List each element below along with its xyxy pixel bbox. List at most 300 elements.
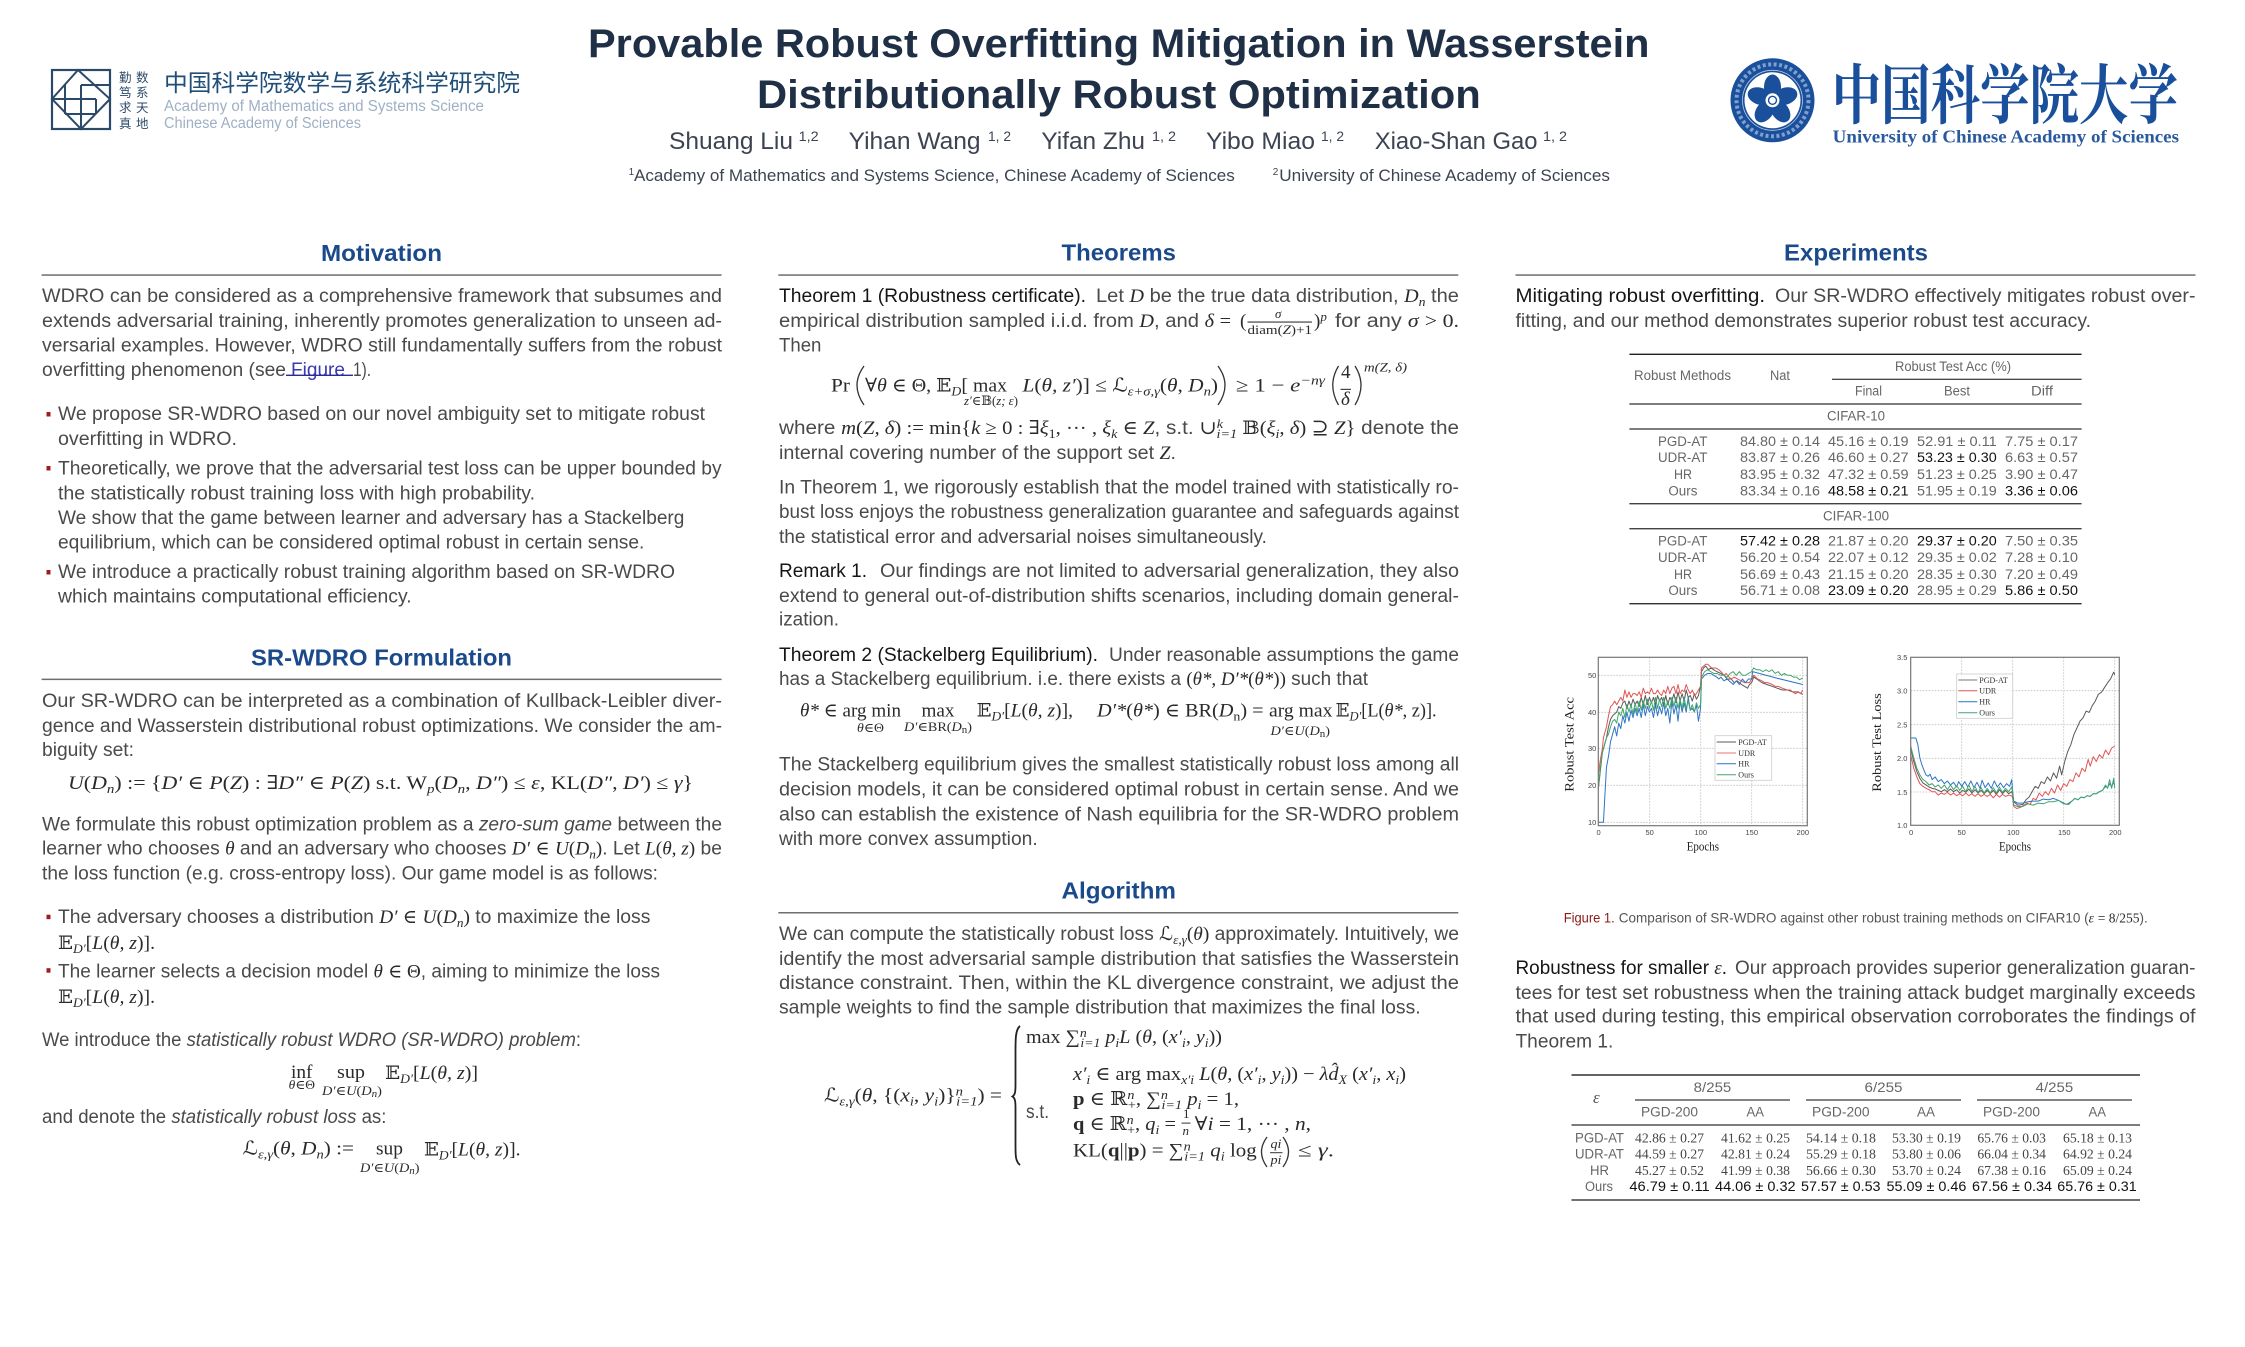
motto characters: 勤 bbox=[119, 71, 132, 85]
equation: Stackelberg equilibrium: ) bbox=[1325, 723, 1330, 738]
motivation paragraph: 1). bbox=[353, 360, 371, 381]
equation: ambiguity set: ( bbox=[435, 773, 442, 794]
equation: algorithm objective: ∈ arg max bbox=[1090, 1064, 1182, 1085]
equation: algorithm objective: i=1 bbox=[1161, 1097, 1182, 1112]
equation: algorithm objective: n bbox=[1127, 1087, 1134, 1102]
CIFAR-10 rows: 53.23 ± 0.30 bbox=[1917, 450, 1997, 465]
contribution bullets bbox=[46, 404, 722, 607]
axis tick labels: 3.5 bbox=[1897, 653, 1907, 662]
equation: algorithm objective: i bbox=[1205, 1035, 1209, 1050]
remark 1: Our findings are not limited to adversarial generalization, they also bbox=[880, 561, 1459, 582]
motto characters: 天 bbox=[136, 101, 149, 115]
row: UDR-AT: UDR-AT bbox=[1575, 1146, 1624, 1161]
algorithm paragraph: We can compute the statistically robust loss ℒ bbox=[779, 924, 1173, 945]
equation: algorithm objective: ) = bbox=[977, 1086, 1002, 1107]
row: Ours: 57.57 ± 0.53 bbox=[1801, 1179, 1880, 1194]
chart: robust test accuracy bbox=[1562, 657, 1809, 854]
game model bullets: D′ bbox=[72, 941, 86, 956]
CIFAR-100 rows: PGD-AT bbox=[1658, 534, 1707, 549]
authors: 1, 2 bbox=[1152, 128, 1176, 144]
equation: algorithm objective: L(θ, (x′ bbox=[1199, 1064, 1257, 1085]
equation: algorithm objective: i bbox=[1115, 1035, 1120, 1050]
row: HR: 67.38 ± 0.16 bbox=[1977, 1163, 2046, 1178]
covering number definition: ∈ bbox=[1117, 418, 1143, 439]
institute name: 中国科学院数学与系统科学研究院 bbox=[164, 70, 520, 96]
equation: robustness certificate: θ, D bbox=[1167, 376, 1202, 397]
equation: algorithm objective: , bbox=[1376, 1064, 1386, 1085]
equation: statistically robust loss: n bbox=[409, 1166, 415, 1177]
authors bbox=[669, 128, 1567, 155]
table header: Best bbox=[1944, 384, 1970, 399]
algorithm paragraph: identify the most adversarial sample distribution that satisfies the Wasserstein bbox=[779, 949, 1459, 970]
CIFAR-10 rows: 84.80 ± 0.14 bbox=[1740, 434, 1821, 449]
equation: inf sup: sup bbox=[337, 1062, 365, 1083]
motivation paragraph: versarial examples. However, WDRO still fundamentally suffers from the robust bbox=[42, 335, 723, 356]
chart: robust test loss bbox=[1870, 653, 2122, 854]
axis tick labels: 50 bbox=[1588, 671, 1596, 680]
CIFAR-100 rows: 29.35 ± 0.02 bbox=[1917, 550, 1997, 565]
game paragraph: the loss function (e.g. cross-entropy loss). Our game model is as follows: bbox=[42, 863, 658, 884]
equation: statistically robust loss: θ, D bbox=[280, 1138, 315, 1159]
equation: robustness certificate bbox=[831, 360, 1407, 410]
row: UDR-AT: 55.29 ± 0.18 bbox=[1806, 1146, 1876, 1161]
equation: robustness certificate: ε+σ,γ bbox=[1128, 384, 1161, 399]
row: HR: 56.66 ± 0.30 bbox=[1806, 1163, 1876, 1178]
row: Ours: Ours bbox=[1585, 1179, 1613, 1194]
equation: Stackelberg equilibrium: D′ bbox=[990, 709, 1004, 724]
equation: algorithm objective: , bbox=[1186, 1027, 1196, 1048]
formulation intro: gence and Wasserstein distributional robust optimizations. We consider the am- bbox=[42, 716, 722, 737]
row: UDR-AT: 44.59 ± 0.27 bbox=[1635, 1146, 1704, 1161]
equation: algorithm objective: X bbox=[1337, 1072, 1348, 1087]
equation: algorithm objective: i=1 bbox=[956, 1094, 977, 1109]
row: HR: 65.09 ± 0.24 bbox=[2063, 1163, 2132, 1178]
row: PGD-AT: 65.18 ± 0.13 bbox=[2063, 1130, 2132, 1145]
table header: Robust Test Acc (%) bbox=[1895, 359, 2011, 374]
equation: ambiguity set: , bbox=[465, 773, 476, 794]
equation: robustness certificate: Pr bbox=[831, 376, 851, 397]
axis tick labels: 150 bbox=[2058, 828, 2071, 837]
panel: experiments bbox=[1516, 240, 2196, 1201]
covering number definition: Z, s.t. ∪ bbox=[1143, 418, 1215, 439]
equation: algorithm objective: i bbox=[1086, 1072, 1091, 1087]
equation: algorithm objective: n bbox=[1080, 1025, 1087, 1040]
row: UDR-AT bbox=[1575, 1146, 2132, 1161]
CIFAR-100 rows: 7.50 ± 0.35 bbox=[2005, 534, 2078, 549]
table header: Robust Methods bbox=[1634, 368, 1731, 383]
equation: robustness certificate: [ bbox=[961, 376, 968, 397]
axis tick labels: 3.0 bbox=[1897, 686, 1907, 696]
heading: Theorems: Theorems bbox=[1062, 240, 1176, 266]
motto characters bbox=[119, 70, 149, 131]
equation: Stackelberg equilibrium: θ*, z)]. bbox=[1385, 701, 1438, 722]
game paragraph: We formulate this robust optimization problem as a zero-sum game between the bbox=[42, 814, 722, 835]
game paragraph: learner who chooses θ and an adversary who chooses D′ ∈ U(D bbox=[42, 838, 589, 859]
equation: algorithm objective: ( bbox=[855, 1086, 862, 1107]
axis tick labels: 30 bbox=[1588, 744, 1596, 753]
motto characters: 系 bbox=[136, 86, 149, 100]
theorem 1 discussion: the statistical error and adversarial noises simultaneously. bbox=[779, 527, 1267, 548]
mitigating robust overfitting paragraph bbox=[1516, 286, 2196, 332]
equation: algorithm objective: , bbox=[914, 1086, 925, 1107]
table header: 6/255 bbox=[1864, 1080, 1902, 1095]
theorem 1 statement: ) bbox=[1314, 311, 1320, 332]
row: PGD-AT: 53.30 ± 0.19 bbox=[1892, 1130, 1961, 1145]
row: Ours: 65.76 ± 0.31 bbox=[2057, 1179, 2137, 1194]
equation: algorithm objective: p bbox=[1185, 1089, 1198, 1110]
table header bbox=[1634, 359, 2053, 399]
game model bullets: L(θ, z)]. bbox=[92, 933, 154, 954]
title bbox=[588, 22, 1650, 117]
covering number definition: i bbox=[1276, 426, 1280, 441]
row: Ours: 67.56 ± 0.34 bbox=[1972, 1179, 2053, 1194]
robustness paragraph: Theorem 1. bbox=[1516, 1032, 1613, 1053]
CIFAR-10 rows: 48.58 ± 0.21 bbox=[1828, 484, 1908, 499]
CIFAR-10 rows: 45.16 ± 0.19 bbox=[1828, 434, 1908, 449]
game model bullets: n bbox=[457, 915, 463, 930]
equation: algorithm objective: x′ bbox=[1358, 1064, 1373, 1085]
motivation paragraph: overfitting phenomenon (see bbox=[42, 360, 286, 381]
robustness paragraph bbox=[1516, 958, 2196, 1053]
equation: algorithm objective: i bbox=[1198, 1097, 1202, 1112]
equation: algorithm objective: ) bbox=[1399, 1064, 1406, 1085]
axis titles bbox=[1562, 696, 1719, 854]
algorithm paragraph: θ) approximately. Intuitively, we bbox=[1193, 924, 1455, 945]
equation: algorithm objective: , ∑ bbox=[1136, 1089, 1161, 1110]
equation: Stackelberg equilibrium: D′*(θ*) ∈ BR(D bbox=[1097, 701, 1232, 722]
legend: Ours bbox=[1979, 708, 1995, 718]
table: robust test accuracy bbox=[1629, 354, 2082, 604]
row: PGD-AT: 65.76 ± 0.03 bbox=[1977, 1130, 2046, 1145]
equation: inf sup bbox=[289, 1062, 478, 1100]
equation: algorithm objective: + bbox=[1127, 1122, 1135, 1137]
CIFAR-100 rows: 56.69 ± 0.43 bbox=[1740, 567, 1820, 582]
equation: algorithm objective: i=1 bbox=[1080, 1035, 1100, 1050]
authors: 1, 2 bbox=[988, 128, 1011, 144]
axis tick labels: 200 bbox=[1796, 828, 1809, 837]
game paragraph bbox=[42, 814, 722, 884]
table header: 8/255 bbox=[1694, 1080, 1731, 1095]
equation: algorithm objective: x′ bbox=[1072, 1064, 1087, 1085]
legend bbox=[1715, 736, 1772, 780]
CIFAR-10 rows: PGD-AT bbox=[1658, 434, 1707, 449]
motto characters: 求 bbox=[119, 101, 132, 115]
CIFAR-10 rows: HR bbox=[1674, 467, 1692, 482]
CIFAR-100 rows: 21.15 ± 0.20 bbox=[1828, 567, 1908, 582]
game model bullets: D′ bbox=[72, 995, 86, 1010]
icon: AMSS square emblem bbox=[52, 70, 110, 129]
axis tick labels: 100 bbox=[1694, 828, 1707, 837]
covering number definition: ξ bbox=[1102, 418, 1112, 439]
equation: Stackelberg equilibrium: [L( bbox=[1361, 701, 1385, 722]
CIFAR-100 rows: 56.71 ± 0.08 bbox=[1740, 583, 1820, 598]
equation: algorithm objective: + bbox=[1128, 1097, 1136, 1112]
authors: Xiao-Shan Gao bbox=[1375, 128, 1538, 155]
axis titles: Robust Test Acc bbox=[1562, 696, 1576, 792]
theorem 1 statement: Then bbox=[779, 336, 821, 357]
equation: algorithm objective: ( bbox=[1347, 1064, 1359, 1085]
motivation paragraph: Figure bbox=[291, 360, 345, 381]
equation: algorithm objective: , bbox=[1261, 1064, 1272, 1085]
equation: robustness certificate: max bbox=[973, 376, 1008, 397]
motto characters: 真 bbox=[119, 117, 132, 131]
table header: 4/255 bbox=[2036, 1080, 2073, 1095]
figure caption: Figure 1. bbox=[1564, 910, 1615, 926]
theorem 1 statement: p bbox=[1319, 309, 1327, 324]
covering number definition: where m(Z, δ) := min{ k ≥ 0 : ∃ ξ bbox=[779, 418, 1048, 439]
equation: algorithm objective: q bbox=[1210, 1141, 1221, 1162]
table header: PGD-200 bbox=[1812, 1105, 1870, 1120]
equation: statistically robust loss: 𝔼 bbox=[424, 1139, 438, 1160]
equation: Stackelberg equilibrium: [ bbox=[1004, 701, 1011, 722]
row: PGD-AT: 54.14 ± 0.18 bbox=[1806, 1130, 1876, 1145]
row: HR: 53.70 ± 0.24 bbox=[1892, 1163, 1961, 1178]
equation: inf sup: inf bbox=[291, 1062, 313, 1083]
theorem 2 statement: has a Stackelberg equilibrium. i.e. there exists a (θ*, D′*(θ*)) such that bbox=[779, 669, 1369, 690]
game model bullets: [ bbox=[86, 987, 92, 1008]
legend: PGD-AT bbox=[1738, 738, 1767, 747]
equation: robustness certificate: −nγ bbox=[1300, 373, 1326, 388]
covering number definition: 𝔹( bbox=[1237, 418, 1267, 439]
mitigating robust overfitting paragraph: Mitigating robust overfitting. bbox=[1516, 286, 1765, 307]
row: Ours bbox=[1585, 1179, 2137, 1194]
row: Ours: 46.79 ± 0.11 bbox=[1629, 1179, 1710, 1194]
theorem 1 statement: ( bbox=[1240, 311, 1246, 332]
university name in Chinese: 中国科学院大学 bbox=[1832, 60, 2178, 133]
CIFAR-10 rows: UDR-AT bbox=[1658, 450, 1707, 465]
table header: AA bbox=[1746, 1105, 1764, 1120]
axis tick labels: 0 bbox=[1596, 828, 1601, 837]
legend: PGD-AT bbox=[1979, 676, 2008, 685]
equation: algorithm objective: i bbox=[1281, 1072, 1285, 1087]
equation: algorithm objective: = 1, bbox=[1201, 1089, 1239, 1110]
table header bbox=[1593, 1080, 2106, 1120]
equation: algorithm objective: ∀i = 1, ··· , n, bbox=[1195, 1114, 1311, 1135]
equation: statistically robust loss: [ bbox=[452, 1139, 458, 1160]
equation: statistically robust loss: ) := bbox=[324, 1138, 354, 1159]
remark 1 bbox=[779, 561, 1459, 631]
axis tick labels: 10 bbox=[1588, 818, 1596, 827]
equation: algorithm objective: n bbox=[1161, 1087, 1168, 1102]
heading: Algorithm: Algorithm bbox=[1062, 877, 1176, 903]
game model bullets: The learner selects a decision model θ ∈ Θ, aiming to minimize the loss bbox=[58, 962, 660, 982]
covering number definition: δ) ⊇ Z} denote the bbox=[1290, 418, 1451, 439]
equation: Stackelberg equilibrium: 𝔼 bbox=[977, 701, 991, 722]
axis tick labels: 50 bbox=[1958, 828, 1966, 837]
equation: ambiguity set: D bbox=[441, 773, 458, 794]
CIFAR-100 rows bbox=[1658, 509, 2078, 598]
equation: algorithm objective: )) bbox=[1209, 1027, 1222, 1048]
equation: statistically robust loss: ) bbox=[415, 1160, 420, 1175]
equation: Stackelberg equilibrium: 𝔼 bbox=[1336, 701, 1350, 722]
axis tick labels bbox=[1897, 653, 2122, 837]
equation: algorithm objective: L bbox=[1118, 1027, 1130, 1048]
equation: algorithm objective: i bbox=[1395, 1072, 1400, 1087]
axis tick labels: 100 bbox=[2007, 828, 2020, 837]
table header: Diff bbox=[2031, 384, 2053, 399]
covering number definition: , bbox=[1279, 418, 1290, 439]
equation: Stackelberg equilibrium: D′∈BR(D bbox=[904, 719, 961, 734]
equation: Stackelberg equilibrium: θ∈Θ bbox=[857, 720, 884, 735]
algorithm paragraph bbox=[779, 924, 1459, 1018]
mitigating robust overfitting paragraph: fitting, and our method demonstrates superior robust test accuracy. bbox=[1516, 311, 2091, 332]
row: Ours: 44.06 ± 0.32 bbox=[1715, 1179, 1796, 1194]
row: PGD-AT: 41.62 ± 0.25 bbox=[1721, 1130, 1790, 1145]
equation: robustness certificate: D bbox=[950, 384, 962, 399]
equation: Stackelberg equilibrium: ) bbox=[967, 719, 972, 734]
theorem 2 discussion bbox=[778, 755, 1459, 850]
covering number definition: k bbox=[1111, 426, 1118, 441]
equation: robustness certificate: ∀θ ∈ Θ, 𝔼 bbox=[865, 376, 948, 397]
axis tick labels bbox=[1588, 671, 1809, 837]
game model bullets: 𝔼 bbox=[58, 987, 72, 1008]
game paragraph: n bbox=[589, 846, 596, 861]
game model bullets: The adversary chooses a distribution D′ ∈ U(D bbox=[58, 907, 457, 928]
equation: algorithm objective: x′i bbox=[1180, 1072, 1195, 1087]
panel: theorems bbox=[778, 240, 1460, 850]
theorem 2 discussion: with more convex assumption. bbox=[778, 829, 1038, 850]
equation: algorithm objective: n bbox=[1182, 1123, 1189, 1138]
game paragraph: . Let L(θ, z) be bbox=[602, 838, 722, 859]
legend: HR bbox=[1738, 760, 1750, 768]
heading: SR-WDRO Formulation: SR-WDRO Formulation bbox=[251, 645, 512, 671]
row: Ours: 55.09 ± 0.46 bbox=[1886, 1179, 1966, 1194]
theorem 1 statement: Let D be the true data distribution, D bbox=[1096, 286, 1418, 307]
equation: statistically robust loss: ε,γ bbox=[258, 1146, 274, 1161]
CIFAR-100 rows: 7.28 ± 0.10 bbox=[2005, 550, 2078, 565]
equation: algorithm objective: s.t. bbox=[1026, 1102, 1049, 1123]
game model bullets: 𝔼 bbox=[58, 933, 72, 954]
remark 1: extend to general out-of-distribution shifts scenarios, including domain general- bbox=[779, 586, 1459, 607]
theorem 1 statement: n bbox=[1419, 294, 1425, 309]
equation: robustness certificate: z′∈𝔹(z; ε) bbox=[963, 393, 1018, 408]
CIFAR-100 rows: HR bbox=[1674, 567, 1692, 582]
theorem 1 statement: empirical distribution sampled i.i.d. from D, and δ = bbox=[779, 311, 1231, 332]
table header: Final bbox=[1855, 384, 1882, 399]
equation: ambiguity set: p bbox=[426, 781, 435, 796]
CIFAR-100 rows: 29.37 ± 0.20 bbox=[1917, 534, 1997, 549]
axis tick labels: 20 bbox=[1588, 781, 1596, 790]
equation: Stackelberg equilibrium: n bbox=[1233, 709, 1241, 724]
formulation intro bbox=[42, 691, 722, 761]
equation: algorithm objective: i bbox=[1182, 1035, 1186, 1050]
equation: algorithm objective: i bbox=[1155, 1122, 1160, 1137]
equation: algorithm objective: θ, {(x bbox=[862, 1086, 909, 1107]
equation: robustness certificate: ) bbox=[1211, 376, 1218, 397]
contribution bullets: overfitting in WDRO. bbox=[58, 429, 237, 450]
algorithm paragraph: distance constraint. Then, within the KL divergence constraint, we adjust the bbox=[779, 973, 1459, 994]
theorem 2 statement bbox=[779, 645, 1459, 690]
equation: statistically robust loss: n bbox=[317, 1146, 324, 1161]
legend: Ours bbox=[1738, 770, 1754, 780]
affiliations: Academy of Mathematics and Systems Science, Chinese Academy of Sciences bbox=[634, 166, 1235, 185]
equation: algorithm objective: ε,γ bbox=[839, 1094, 856, 1109]
equation: algorithm objective: p bbox=[1103, 1027, 1115, 1048]
covering number definition: ξ bbox=[1267, 418, 1276, 439]
table header: AA bbox=[2088, 1105, 2106, 1120]
CIFAR-10 rows: 51.23 ± 0.25 bbox=[1917, 467, 1997, 482]
equation: Stackelberg equilibrium: D′∈U(D bbox=[1270, 723, 1319, 738]
equation: algorithm objective: )} bbox=[938, 1086, 956, 1107]
covering number definition bbox=[778, 416, 1459, 464]
equation: algorithm objective bbox=[824, 1025, 1406, 1167]
equation: algorithm objective: x bbox=[1385, 1064, 1396, 1085]
axis tick labels: 200 bbox=[2109, 828, 2122, 837]
equation: ambiguity set: D′ ∈ P(Z) : ∃D″ ∈ P(Z) s.t. W bbox=[162, 773, 419, 794]
CIFAR-10 rows: 3.90 ± 0.47 bbox=[2005, 467, 2078, 482]
equation: robustness certificate: L(θ, z′)] ≤ ℒ bbox=[1022, 376, 1122, 397]
equation: ambiguity set: n bbox=[458, 781, 465, 796]
CIFAR-10 rows: 6.63 ± 0.57 bbox=[2005, 450, 2078, 465]
CIFAR-100 rows: 23.09 ± 0.20 bbox=[1828, 583, 1908, 598]
equation: algorithm objective: y bbox=[1194, 1027, 1205, 1048]
row: PGD-AT: PGD-AT bbox=[1575, 1130, 1624, 1145]
row: PGD-AT: 42.86 ± 0.27 bbox=[1635, 1130, 1704, 1145]
motivation paragraph: extends adversarial training, inherently promotes generalization to unseen ad- bbox=[42, 311, 722, 332]
axis tick labels: 1.5 bbox=[1897, 788, 1907, 797]
legend bbox=[1957, 674, 2013, 718]
theorem 1 statement bbox=[779, 286, 1459, 357]
SR-WDRO problem sentence: We introduce the statistically robust WDRO (SR-WDRO) problem: bbox=[42, 1030, 581, 1051]
authors: 1, 2 bbox=[1321, 128, 1344, 144]
equation: algorithm objective: (θ, (x′ bbox=[1135, 1027, 1181, 1048]
equation: algorithm objective: , bbox=[1135, 1114, 1145, 1135]
data lines bbox=[1911, 672, 2115, 808]
equation: algorithm objective: log bbox=[1225, 1141, 1257, 1162]
row: HR: HR bbox=[1590, 1163, 1609, 1178]
CIFAR-100 rows: CIFAR-100 bbox=[1823, 509, 1889, 524]
robustness paragraph: Robustness for smaller ε. bbox=[1516, 958, 1727, 979]
contribution bullets: which maintains computational efficiency. bbox=[57, 586, 412, 607]
affiliations: University of Chinese Academy of Sciences bbox=[1279, 166, 1610, 185]
equation: algorithm objective: max ∑ bbox=[1026, 1027, 1077, 1048]
row: PGD-AT bbox=[1575, 1130, 2132, 1145]
contribution bullets: equilibrium, which can be considered optimal robust in certain sense. bbox=[58, 532, 644, 553]
theorem 1 discussion bbox=[779, 477, 1460, 548]
theorem 1 statement: diam( Z)+1 bbox=[1248, 322, 1312, 337]
equation: robustness certificate: m(Z, δ) bbox=[1364, 360, 1407, 375]
authors: 1,2 bbox=[799, 128, 819, 144]
equation: algorithm objective: n bbox=[1127, 1112, 1134, 1127]
theorem 1 statement: the bbox=[1425, 286, 1459, 307]
row: UDR-AT: 64.92 ± 0.24 bbox=[2063, 1146, 2132, 1161]
row: HR: 41.99 ± 0.38 bbox=[1721, 1163, 1790, 1178]
equation: ambiguity set: D″) ≤ ε, KL( D″, D′) ≤ γ} bbox=[476, 773, 692, 794]
equation: algorithm objective: ℒ bbox=[824, 1086, 838, 1107]
motto characters: 地 bbox=[136, 117, 149, 131]
equation: algorithm objective: = bbox=[1159, 1114, 1176, 1135]
table header: ε bbox=[1593, 1088, 1600, 1107]
equation: algorithm objective: i bbox=[910, 1094, 914, 1109]
institute name bbox=[164, 70, 520, 132]
CIFAR-10 rows: 7.75 ± 0.17 bbox=[2005, 434, 2078, 449]
CIFAR-100 rows: Ours bbox=[1668, 583, 1698, 598]
covering number definition: i=1 bbox=[1217, 426, 1237, 441]
equation: inf sup: ) bbox=[377, 1083, 382, 1098]
motto characters: 笃 bbox=[119, 85, 132, 100]
theorem 2 discussion: The Stackelberg equilibrium gives the smallest statistically robust loss among all bbox=[779, 755, 1459, 776]
title: Distributionally Robust Optimization bbox=[757, 73, 1481, 117]
axis titles: Epochs bbox=[1687, 840, 1719, 854]
equation: statistically robust loss: D′∈U(D bbox=[360, 1160, 408, 1175]
axis tick labels: 50 bbox=[1646, 828, 1654, 837]
covering number definition: , ··· , bbox=[1056, 418, 1102, 439]
theorem 1 discussion: In Theorem 1, we rigorously establish that the model trained with statistically ro- bbox=[779, 477, 1459, 498]
equation: algorithm objective: y bbox=[922, 1086, 935, 1107]
equation: statistically robust loss: sup bbox=[376, 1138, 403, 1159]
CIFAR-10 rows: 83.34 ± 0.16 bbox=[1740, 484, 1820, 499]
table: robustness for smaller budgets bbox=[1572, 1074, 2140, 1201]
